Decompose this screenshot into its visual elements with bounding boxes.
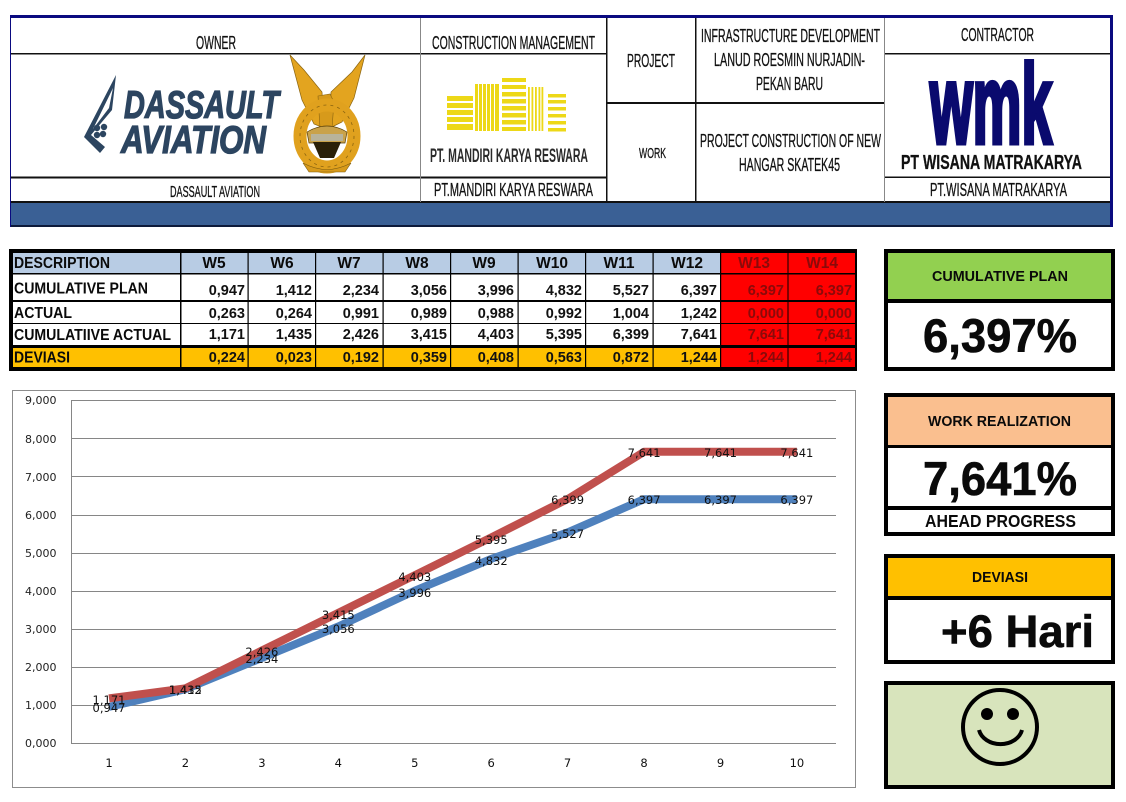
heading: construction management: CONSTRUCTION MANAGEMENT bbox=[432, 32, 595, 53]
data labels: cumulative plan: 2,234 bbox=[245, 652, 278, 666]
table header row: W11 bbox=[603, 255, 635, 272]
data labels: cumulative actual: 4,403 bbox=[398, 570, 431, 584]
row: cumulative plan: 5,527 bbox=[613, 283, 649, 299]
heading: contractor: CONTRACTOR bbox=[961, 24, 1034, 45]
x axis labels: 6 bbox=[488, 756, 495, 770]
data labels: cumulative actual: 1,435 bbox=[169, 683, 202, 697]
row: cumulative actual: 3,415 bbox=[411, 327, 447, 343]
row: cumulative plan: CUMULATIVE PLAN bbox=[14, 280, 148, 298]
data labels: cumulative plan: 3,056 bbox=[322, 622, 355, 636]
x axis labels: 4 bbox=[335, 756, 342, 770]
row: cumulative actual: 2,426 bbox=[343, 327, 379, 343]
table header row: W6 bbox=[270, 255, 294, 272]
x axis labels: 9 bbox=[717, 756, 724, 770]
x axis labels: 1 bbox=[105, 756, 113, 770]
row: deviasi: 0,563 bbox=[546, 350, 582, 366]
table header row: DESCRIPTION bbox=[14, 255, 110, 272]
row: deviasi bbox=[13, 348, 855, 367]
y axis labels: 5,000 bbox=[25, 547, 56, 560]
panel: work realization card bbox=[884, 393, 1115, 536]
x axis labels: 7 bbox=[564, 756, 571, 770]
row: cumulative plan: 4,832 bbox=[546, 283, 582, 299]
row: deviasi: DEVIASI bbox=[14, 350, 70, 366]
x axis labels: 10 bbox=[790, 756, 804, 770]
card value: 7,641% bbox=[923, 452, 1077, 505]
data labels: cumulative actual: 6,399 bbox=[551, 493, 584, 507]
icon: dassault aviation logo bbox=[84, 75, 281, 162]
row: cumulative actual: 7,641 bbox=[748, 327, 784, 343]
data labels: cumulative plan: 0,947 bbox=[93, 701, 125, 715]
data labels: cumulative actual: 7,641 bbox=[704, 446, 737, 460]
row: actual: 0,989 bbox=[411, 306, 447, 322]
row: cumulative actual: CUMULATIIVE ACTUAL bbox=[14, 327, 171, 344]
row: actual: 0,991 bbox=[343, 306, 379, 322]
y axis labels: 7,000 bbox=[25, 471, 56, 484]
row: cumulative actual: 5,395 bbox=[546, 327, 582, 343]
row: actual bbox=[13, 302, 855, 323]
data labels: cumulative actual: 7,641 bbox=[780, 446, 813, 460]
line: cumulative plan series bbox=[109, 499, 797, 707]
x axis labels bbox=[105, 756, 804, 770]
text: owner name: DASSAULT AVIATION bbox=[170, 184, 260, 201]
table header row: W7 bbox=[337, 255, 361, 272]
y axis labels: 1,000 bbox=[25, 699, 56, 712]
row: cumulative plan: 6,397 bbox=[816, 283, 852, 299]
row: actual: 0,263 bbox=[209, 306, 245, 322]
icon: mandiri karya reswara logo bbox=[430, 78, 588, 167]
row: cumulative plan: 6,397 bbox=[748, 283, 784, 299]
row: actual: 0,000 bbox=[748, 306, 784, 322]
table header row: W5 bbox=[202, 255, 226, 272]
data labels: cumulative actual: 3,415 bbox=[322, 608, 355, 622]
text: project name bbox=[701, 25, 880, 94]
text: project name: INFRASTRUCTURE DEVELOPMENT bbox=[701, 25, 880, 46]
panel: project header block bbox=[10, 15, 1113, 227]
row: cumulative actual: 6,399 bbox=[613, 327, 649, 343]
row: cumulative actual bbox=[13, 324, 855, 345]
icon: smiley face bbox=[963, 690, 1037, 764]
card value: +6 Hari bbox=[941, 606, 1094, 657]
row: cumulative actual: 7,641 bbox=[681, 327, 717, 343]
row: actual: ACTUAL bbox=[14, 305, 72, 322]
y axis labels: 8,000 bbox=[25, 433, 56, 446]
line: cumulative actual series bbox=[109, 452, 797, 698]
row: deviasi: 0,408 bbox=[478, 350, 514, 366]
table header row: W8 bbox=[405, 255, 429, 272]
y axis labels: 3,000 bbox=[25, 623, 56, 636]
row: actual: 1,242 bbox=[681, 306, 717, 322]
table header row: W9 bbox=[472, 255, 496, 272]
row: cumulative actual: 4,403 bbox=[478, 327, 514, 343]
row: cumulative plan: 3,056 bbox=[411, 283, 447, 299]
card value: 6,397% bbox=[923, 309, 1077, 362]
text: work description: HANGAR SKATEK45 bbox=[739, 154, 840, 175]
row: deviasi: 0,359 bbox=[411, 350, 447, 366]
card title: DEVIASI bbox=[972, 570, 1028, 586]
text: project name: LANUD ROESMIN NURJADIN- bbox=[714, 49, 865, 70]
text: construction manager name: PT.MANDIRI KARYA RESWARA bbox=[434, 179, 593, 200]
table header row bbox=[13, 253, 855, 273]
y axis labels: 6,000 bbox=[25, 509, 56, 522]
icon: dassault aviation logo: AVIATION bbox=[120, 119, 267, 162]
panel: weekly progress table bbox=[9, 249, 857, 371]
table header row: W14 bbox=[806, 255, 838, 272]
data labels: cumulative actual: 1,171 bbox=[93, 693, 125, 707]
x axis labels: 2 bbox=[182, 756, 189, 770]
table header row: W12 bbox=[671, 255, 703, 272]
row: cumulative actual: 1,171 bbox=[209, 327, 245, 343]
row: actual: 0,988 bbox=[478, 306, 514, 322]
data labels: cumulative actual: 2,426 bbox=[245, 645, 278, 659]
table header row: W13 bbox=[738, 255, 770, 272]
data labels: cumulative plan: 3,996 bbox=[398, 586, 431, 600]
icon: air force eagle emblem bbox=[290, 55, 365, 172]
row: actual: 0,000 bbox=[816, 306, 852, 322]
y axis labels: 0,000 bbox=[25, 737, 56, 750]
data labels: cumulative plan: 6,397 bbox=[628, 493, 661, 507]
row: deviasi: 1,244 bbox=[816, 350, 852, 366]
data labels: cumulative actual bbox=[93, 446, 813, 707]
data labels: cumulative plan: 4,832 bbox=[475, 554, 508, 568]
icon: wisana matrakarya logo bbox=[901, 42, 1082, 174]
icon: mandiri karya reswara logo: PT. MANDIRI KARYA RESWARA bbox=[430, 146, 588, 167]
x axis labels: 5 bbox=[411, 756, 418, 770]
data labels: cumulative actual: 5,395 bbox=[475, 533, 508, 547]
row: actual: 0,992 bbox=[546, 306, 582, 322]
row: actual: 1,004 bbox=[613, 306, 649, 322]
row: deviasi: 1,244 bbox=[681, 350, 717, 366]
heading: project: PROJECT bbox=[627, 50, 675, 71]
row: deviasi: 0,023 bbox=[276, 350, 312, 366]
data labels: cumulative actual: 7,641 bbox=[628, 446, 661, 460]
y axis labels: 9,000 bbox=[25, 394, 56, 407]
x axis labels: 3 bbox=[258, 756, 266, 770]
panel: status smiley card bbox=[884, 681, 1115, 789]
row: cumulative plan: 2,234 bbox=[343, 283, 379, 299]
y axis labels: 2,000 bbox=[25, 661, 56, 674]
y axis labels: 4,000 bbox=[25, 585, 56, 598]
row: deviasi: 0,872 bbox=[613, 350, 649, 366]
row: deviasi: 0,192 bbox=[343, 350, 379, 366]
card title: CUMULATIVE PLAN bbox=[932, 269, 1068, 285]
row: cumulative plan: 0,947 bbox=[209, 283, 245, 299]
panel: cumulative plan card bbox=[884, 249, 1115, 371]
chart: cumulative plan vs cumulative actual line chart bbox=[12, 390, 856, 788]
panel: deviation card bbox=[884, 554, 1115, 664]
data labels: cumulative plan: 6,397 bbox=[780, 493, 813, 507]
progress status: AHEAD PROGRESS bbox=[925, 511, 1076, 531]
row: cumulative actual: 7,641 bbox=[816, 327, 852, 343]
text: work description bbox=[700, 130, 881, 175]
card title: WORK REALIZATION bbox=[928, 414, 1071, 430]
row: deviasi: 0,224 bbox=[209, 350, 245, 366]
row: cumulative actual: 1,435 bbox=[276, 327, 312, 343]
building blocks bbox=[447, 78, 566, 132]
data labels: cumulative plan: 1,412 bbox=[169, 683, 202, 697]
text: project name: PEKAN BARU bbox=[756, 73, 823, 94]
x axis labels: 8 bbox=[640, 756, 648, 770]
icon: dassault aviation logo: DASSAULT bbox=[124, 84, 281, 127]
data labels: cumulative plan: 5,527 bbox=[551, 527, 584, 541]
heading: owner: OWNER bbox=[196, 32, 236, 53]
row: cumulative plan: 1,412 bbox=[276, 283, 312, 299]
data labels: cumulative plan: 6,397 bbox=[704, 493, 737, 507]
row: cumulative plan bbox=[13, 274, 855, 300]
row: cumulative plan: 3,996 bbox=[478, 283, 514, 299]
table header row: W10 bbox=[536, 255, 568, 272]
row: cumulative plan: 6,397 bbox=[681, 283, 717, 299]
row: deviasi: 1,244 bbox=[748, 350, 784, 366]
data labels: cumulative plan bbox=[93, 493, 813, 715]
heading: work: WORK bbox=[639, 146, 666, 162]
text: work description: PROJECT CONSTRUCTION OF NEW bbox=[700, 130, 881, 151]
y axis labels bbox=[25, 394, 56, 750]
row: actual: 0,264 bbox=[276, 306, 312, 322]
